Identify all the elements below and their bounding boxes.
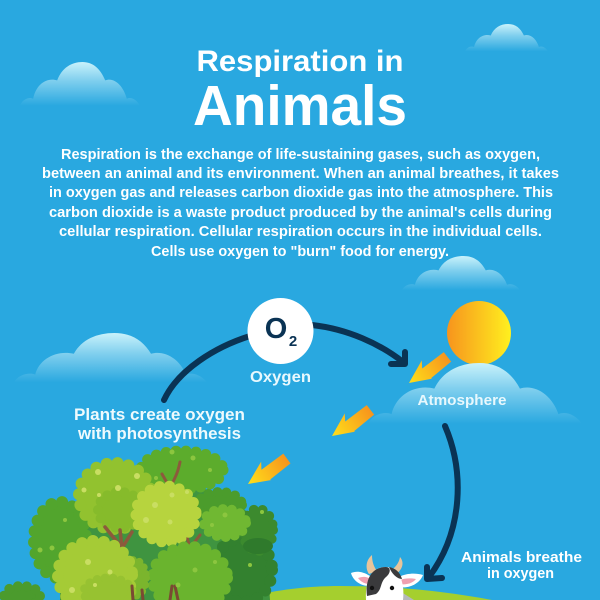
icon: oxygen molecule — [248, 298, 314, 364]
cloud: atmosphere — [368, 363, 582, 427]
label: oxygen: Oxygen — [250, 369, 311, 386]
arrow: oxygen to atmosphere — [312, 325, 405, 364]
label: atmosphere: Atmosphere — [418, 392, 506, 409]
title: Respiration in — [196, 45, 404, 78]
cloud: middle right — [402, 256, 520, 292]
arrow: orange sun to atmosphere — [402, 347, 453, 391]
arrow: orange atmosphere to plants — [325, 400, 376, 444]
icon: sun — [447, 301, 511, 365]
label: animals breathe in oxygen: in oxygen — [487, 565, 554, 582]
intro text: Respiration is the exchange of life-sustaining gases, such as oxygen, — [61, 147, 540, 163]
cloud: top left — [20, 62, 140, 108]
label: animals breathe in oxygen — [461, 549, 582, 582]
arrow: atmosphere to animals — [427, 426, 458, 579]
label: plants create oxygen: Plants create oxygen — [74, 405, 245, 424]
intro text — [42, 147, 559, 260]
ground — [243, 586, 492, 600]
arrow: orange to tree — [242, 449, 293, 492]
intro text: between an animal and its environment. When an animal breathes, it takes — [42, 166, 559, 182]
cloud: top right — [465, 24, 548, 53]
intro text: in oxygen gas and releases carbon dioxide gas into the atmosphere. This — [49, 185, 553, 201]
title — [193, 45, 407, 138]
label: animals breathe in oxygen: Animals breathe — [461, 549, 582, 566]
icon: oxygen molecule: 2 — [289, 333, 297, 350]
intro text: carbon dioxide is a waste product produced by the animal's cells during — [49, 205, 552, 221]
label: plants create oxygen: with photosynthesis — [77, 424, 241, 443]
arrow: left arc to oxygen — [164, 336, 250, 400]
label: plants create oxygen — [74, 405, 245, 443]
title: Animals — [193, 74, 407, 138]
intro text: cellular respiration. Cellular respiration occurs in the individual cells. — [59, 224, 542, 240]
intro text: Cells use oxygen to "burn" food for energy. — [151, 244, 449, 260]
cloud: middle left — [14, 333, 207, 385]
icon: cow — [351, 555, 423, 600]
icon: tree — [4, 450, 273, 600]
icon: oxygen molecule: O — [265, 313, 287, 345]
